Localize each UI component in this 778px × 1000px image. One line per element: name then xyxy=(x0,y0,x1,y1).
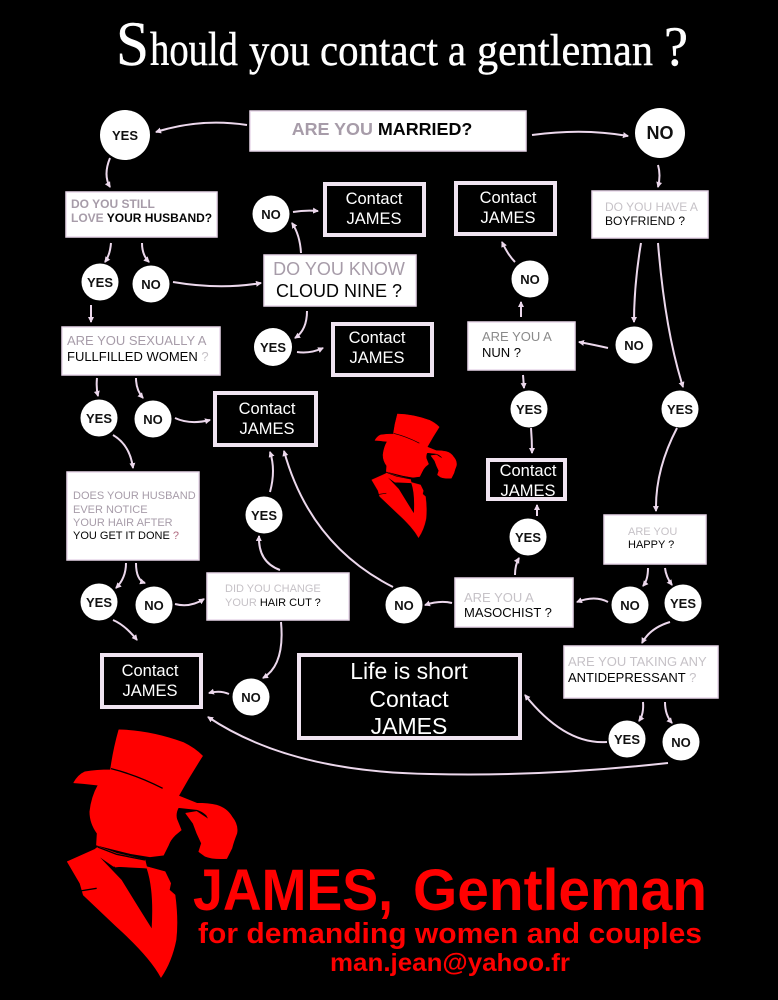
contact box: JAMES xyxy=(480,209,536,227)
question: nun: ARE YOU A xyxy=(482,329,552,344)
question: hair cut: DID YOU CHANGE xyxy=(225,583,321,595)
life is short box xyxy=(299,655,520,739)
title xyxy=(116,8,688,79)
answer nodes: YES xyxy=(260,340,286,355)
contact box: Contact xyxy=(500,462,557,480)
life is short box: Contact xyxy=(369,686,449,712)
question: fulfilled: ARE YOU SEXUALLY A xyxy=(67,333,207,348)
email: man.jean@yahoo.fr xyxy=(330,949,570,977)
question: boyfriend: BOYFRIEND ? xyxy=(605,214,685,228)
contact box: Contact xyxy=(122,662,179,680)
question: boyfriend: DO YOU HAVE A xyxy=(605,200,698,214)
question: husband notice hair: EVER NOTICE xyxy=(73,504,148,516)
contact box: JAMES xyxy=(500,482,556,500)
question: antidepressant: ARE YOU TAKING ANY xyxy=(568,654,707,669)
contact box: JAMES xyxy=(122,682,178,700)
question: hair cut xyxy=(207,573,349,620)
question: masochist: ARE YOU A xyxy=(464,590,534,605)
contact box: Contact xyxy=(349,329,406,347)
contact box: Contact xyxy=(346,190,403,208)
contact box: JAMES xyxy=(239,420,295,438)
answer nodes: NO xyxy=(624,338,644,353)
answer nodes: NO xyxy=(241,690,261,705)
title: ? xyxy=(664,16,688,78)
icon: large gentleman silhouette xyxy=(67,730,237,977)
contact box xyxy=(325,184,424,235)
question: still love husband: DO YOU STILL xyxy=(71,197,155,211)
question: masochist: MASOCHIST ? xyxy=(464,605,552,620)
question: hair cut: YOUR HAIR CUT ? xyxy=(225,597,321,609)
contact box: Contact xyxy=(239,400,296,418)
answer nodes: NO xyxy=(620,598,640,613)
flow arrows xyxy=(91,123,683,775)
answer nodes: NO xyxy=(520,272,540,287)
answer nodes xyxy=(80,108,702,760)
contact box: Contact xyxy=(480,189,537,207)
question: cloud nine: DO YOU KNOW xyxy=(273,259,405,279)
question: fulfilled xyxy=(62,327,220,375)
question: husband notice hair: YOU GET IT DONE ? xyxy=(73,530,179,542)
answer nodes: NO xyxy=(261,207,281,222)
contact box xyxy=(215,393,316,445)
answer nodes: YES xyxy=(670,596,696,611)
question: happy: HAPPY ? xyxy=(628,539,674,551)
question: husband notice hair xyxy=(67,472,199,560)
tagline: for demanding women and couples xyxy=(198,918,702,950)
title: gentleman xyxy=(477,26,653,75)
question: fulfilled: FULLFILLED WOMEN ? xyxy=(67,349,209,364)
contact box: JAMES xyxy=(346,210,402,228)
life is short box: JAMES xyxy=(371,713,447,739)
question: antidepressant xyxy=(564,646,718,698)
question: happy xyxy=(604,515,706,564)
contact box xyxy=(333,324,432,375)
title: you xyxy=(249,26,310,75)
answer nodes: NO xyxy=(141,277,161,292)
answer nodes: YES xyxy=(86,411,112,426)
answer nodes: YES xyxy=(112,128,138,143)
title: hould xyxy=(150,23,238,76)
icon: small gentleman silhouette xyxy=(372,414,457,538)
contact box: JAMES xyxy=(349,349,405,367)
title: a xyxy=(448,26,466,75)
question: cloud nine xyxy=(264,255,416,306)
brand name: JAMES, xyxy=(193,858,393,923)
answer nodes: NO xyxy=(646,123,674,143)
question: are you married xyxy=(250,111,526,151)
answer nodes: NO xyxy=(143,412,163,427)
question: are you married: ARE YOU MARRIED? xyxy=(292,119,472,139)
answer nodes: YES xyxy=(614,732,640,747)
answer nodes: NO xyxy=(394,598,414,613)
answer nodes: NO xyxy=(671,735,691,750)
answer nodes: YES xyxy=(667,402,693,417)
question: husband notice hair: YOUR HAIR AFTER xyxy=(73,517,173,529)
contact box xyxy=(102,655,201,707)
brand name: Gentleman xyxy=(413,858,707,923)
contact box xyxy=(488,460,565,500)
answer nodes: YES xyxy=(87,275,113,290)
answer nodes: YES xyxy=(516,402,542,417)
question: cloud nine: CLOUD NINE ? xyxy=(276,281,402,301)
question: masochist xyxy=(455,578,573,627)
question: antidepressant: ANTIDEPRESSANT ? xyxy=(568,670,696,685)
question: boyfriend xyxy=(592,191,708,238)
title: S xyxy=(116,8,149,79)
answer nodes: NO xyxy=(144,598,164,613)
question: nun xyxy=(468,322,575,370)
question: happy: ARE YOU xyxy=(628,526,677,538)
answer nodes: YES xyxy=(86,595,112,610)
question: still love husband: LOVE YOUR HUSBAND? xyxy=(71,211,212,225)
brand name xyxy=(193,858,707,923)
question: husband notice hair: DOES YOUR HUSBAND xyxy=(73,490,196,502)
question: still love husband xyxy=(66,192,217,237)
title: contact xyxy=(320,26,438,75)
life is short box: Life is short xyxy=(350,658,468,684)
contact box xyxy=(456,183,555,234)
question: nun: NUN ? xyxy=(482,345,521,360)
answer nodes: YES xyxy=(515,530,541,545)
answer nodes: YES xyxy=(251,508,277,523)
